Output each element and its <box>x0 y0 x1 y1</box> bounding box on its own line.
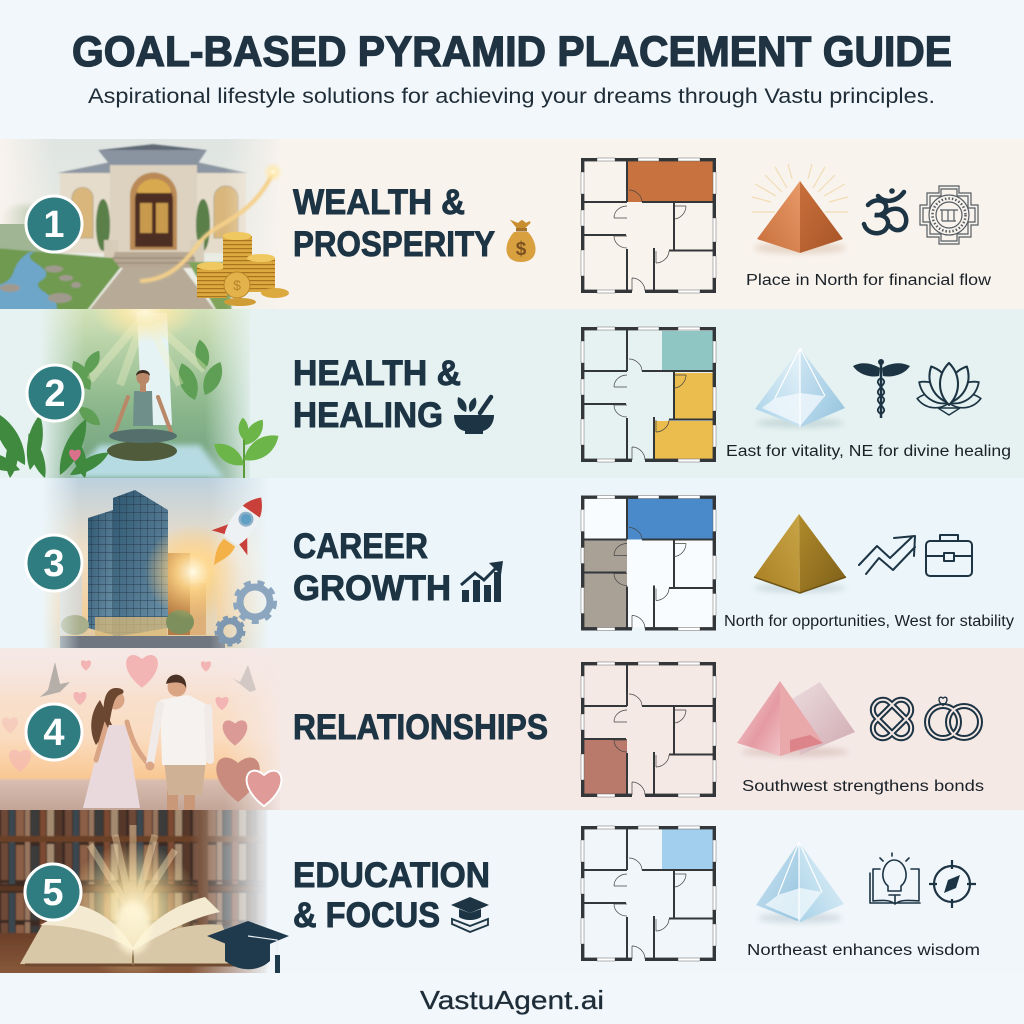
hearts and doves <box>2 655 256 772</box>
panel: career growth <box>0 478 1024 648</box>
floor plan: north and west highlighted <box>581 496 716 630</box>
icon: caduceus <box>853 359 910 418</box>
icon: rising arrow <box>859 536 915 574</box>
rose quartz pyramids <box>737 681 855 757</box>
caption: North for opportunities, West for stability <box>724 613 1014 630</box>
open book <box>20 897 240 965</box>
foreground plants <box>0 415 278 478</box>
title: GOAL-BASED PYRAMID PLACEMENT GUIDE <box>72 28 952 76</box>
heading <box>293 183 495 264</box>
swoosh of golden energy <box>140 162 283 281</box>
icon: money bag <box>506 221 536 262</box>
number badge 5: 5 <box>42 872 64 914</box>
icon: wedding rings <box>927 697 980 738</box>
icon: mortar and pestle <box>454 395 494 434</box>
heading: & FOCUS <box>293 896 440 935</box>
number badge 1 <box>26 196 82 252</box>
illustration: office tower at sunrise <box>42 478 279 648</box>
heading <box>293 856 490 935</box>
number badge 4: 4 <box>43 712 65 754</box>
panel: education and focus <box>0 806 1024 978</box>
gold coin stacks <box>197 232 289 306</box>
icon: briefcase <box>926 535 972 576</box>
icon: graduation cap on book <box>451 897 489 932</box>
heading: RELATIONSHIPS <box>293 708 548 747</box>
woman <box>83 688 150 808</box>
heading: HEALING <box>293 396 443 435</box>
panel: health and healing <box>0 309 1024 478</box>
caption: East for vitality, NE for divine healing <box>726 443 1011 460</box>
illustration: house with stream and coins <box>0 135 289 313</box>
heading: EDUCATION <box>293 856 490 895</box>
heading: WEALTH & <box>293 183 465 222</box>
icon: interlocked knot <box>869 696 915 742</box>
icon: lotus <box>915 363 983 415</box>
icon: book with lightbulb <box>870 853 920 904</box>
caption: Northeast enhances wisdom <box>747 942 980 959</box>
panel: relationships <box>0 648 1024 810</box>
gold coin stacks: $ <box>233 277 241 293</box>
number badge 1: 1 <box>43 204 65 246</box>
floor plan: southwest highlighted <box>581 662 716 797</box>
number badge 3: 3 <box>43 543 65 585</box>
icon: om <box>864 188 906 233</box>
number badge 2: 2 <box>44 373 66 415</box>
caption: Place in North for financial flow <box>746 272 992 289</box>
icon: bar chart arrow <box>461 561 503 602</box>
large hearts <box>216 758 281 806</box>
number badge 2 <box>27 365 83 421</box>
heading <box>293 354 461 435</box>
clear quartz pyramid <box>755 348 845 428</box>
floor plan: east and northeast highlighted <box>581 327 716 462</box>
heading: GROWTH <box>293 569 451 608</box>
floor plan: northeast highlighted <box>581 826 716 961</box>
icon: yantra <box>920 186 978 244</box>
heading: CAREER <box>293 527 428 566</box>
icon: compass <box>929 860 976 908</box>
illustration: meditation by a waterfall <box>0 309 278 478</box>
footer brand: VastuAgent.ai <box>420 985 604 1015</box>
illustration: glowing open book in a library <box>0 806 289 978</box>
crystal pyramid <box>756 842 844 923</box>
man <box>146 675 210 810</box>
copper pyramid with rays <box>752 164 848 254</box>
panel: wealth and prosperity <box>0 135 1024 313</box>
floor plan: north highlighted <box>581 158 716 293</box>
subtitle: Aspirational lifestyle solutions for achieving your dreams through Vastu principles. <box>88 85 935 108</box>
rocket <box>212 498 262 566</box>
heading: HEALTH & <box>293 354 461 393</box>
graduation cap <box>207 921 289 974</box>
gold pyramid <box>754 514 846 593</box>
icon: money bag: $ <box>516 239 527 260</box>
number badge 3 <box>26 535 82 591</box>
illustration: couple at sunset <box>0 648 285 810</box>
gears <box>216 582 275 645</box>
heading: PROSPERITY <box>293 225 495 264</box>
meditating figure <box>109 370 177 443</box>
heading <box>293 527 451 608</box>
number badge 5 <box>25 864 81 920</box>
number badge 4 <box>26 704 82 760</box>
caption: Southwest strengthens bonds <box>742 778 984 795</box>
